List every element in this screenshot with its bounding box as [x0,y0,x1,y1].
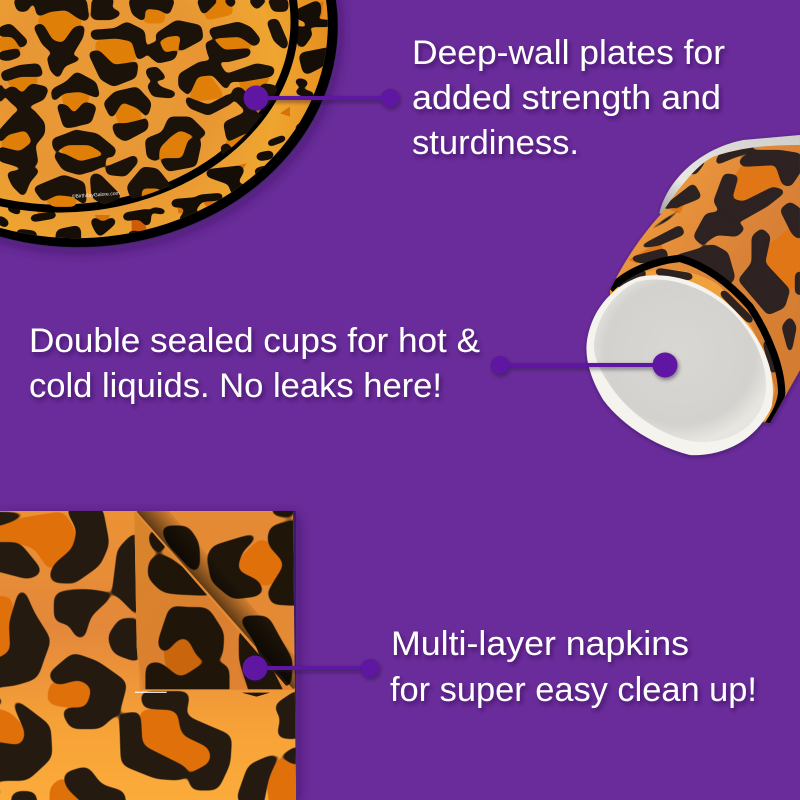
band strip [610,269,775,427]
cup band [610,258,782,427]
text: plates: sturdiness. [412,124,579,162]
cup rim [659,135,800,217]
rim spots [0,5,328,243]
napkin fold [134,511,295,697]
text: cups: cold liquids. No leaks here! [29,367,442,405]
plate orange patches [2,2,267,203]
text: napkins: for super easy clean up! [390,671,757,709]
napkin [0,497,310,800]
text: napkins [390,625,757,709]
crease shadow [136,511,295,690]
text: plates: added strength and [412,79,721,117]
text: cups: Double sealed cups for hot & [29,322,480,360]
folded triangle [134,512,289,689]
callout: plates connector [244,86,399,110]
text: plates: Deep-wall plates for [412,34,725,72]
cup dark spots [632,146,800,352]
plate black spots [0,0,287,203]
napkin orange patches [0,512,307,800]
text: plates [412,34,725,162]
rim orange patches [35,2,323,243]
cup base [586,275,773,455]
cup orange patches [628,160,800,290]
plate well [0,0,312,231]
cup body [610,145,800,423]
callout: cups connector [491,352,678,378]
watermark: ©BirthdayGalore.com [72,190,120,200]
cup [586,135,800,455]
plate [0,0,352,264]
callout: napkins connector [242,656,379,680]
text: napkins: Multi-layer napkins [391,625,689,663]
text: cups [29,322,480,405]
napkin dark spots [0,508,300,800]
